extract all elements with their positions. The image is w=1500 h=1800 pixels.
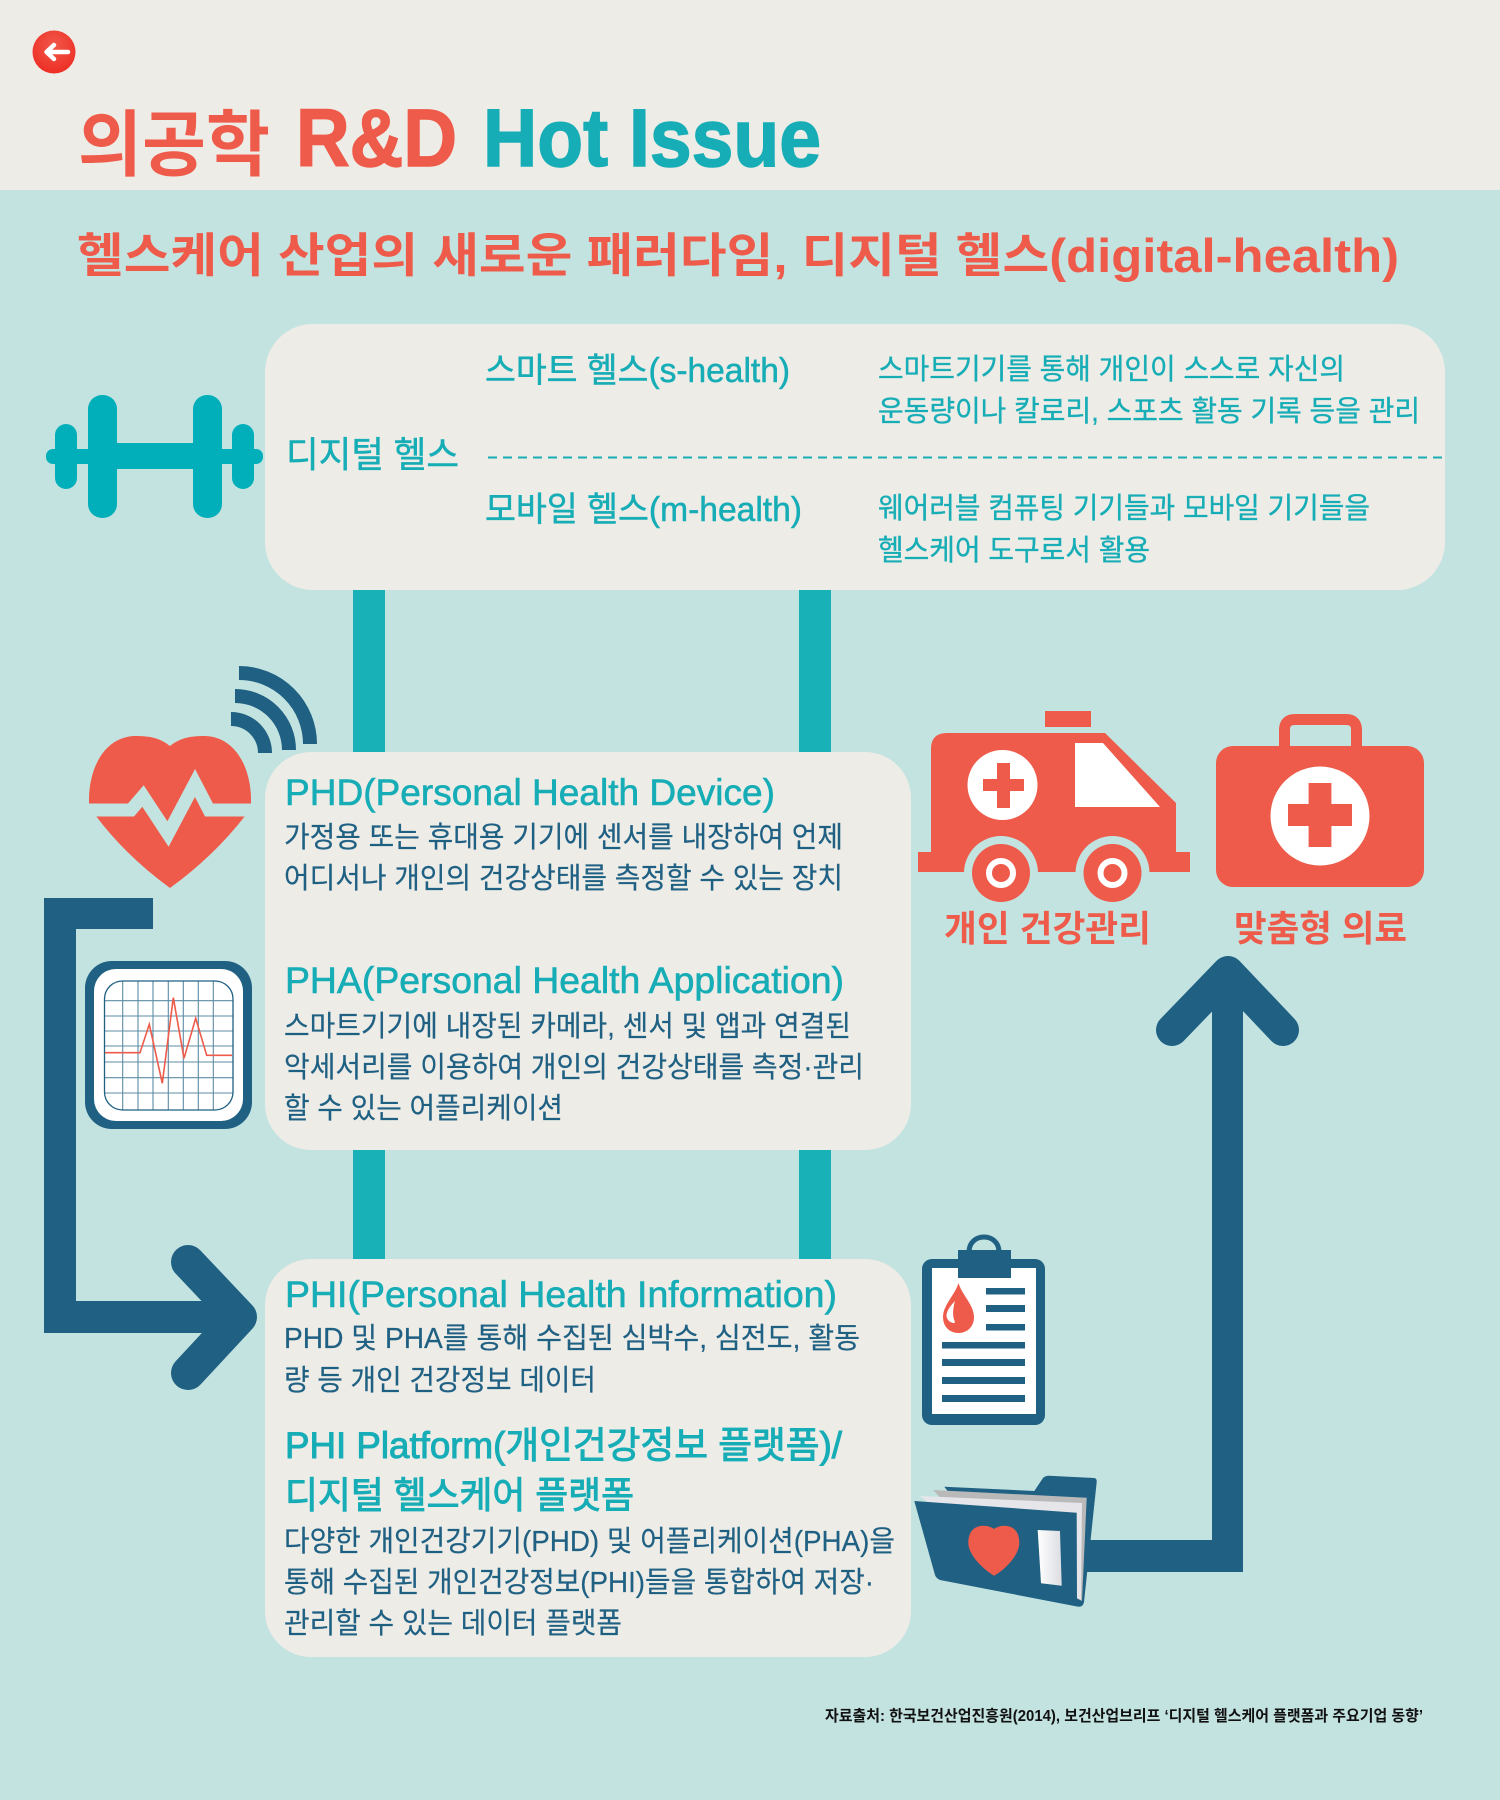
text block: PHA: 악세서리를 이용하여 개인의 건강상태를 측정·관리 xyxy=(284,1051,864,1084)
title: R&D xyxy=(296,93,457,184)
text block: PHI platform: 관리할 수 있는 데이터 플랫폼 xyxy=(284,1607,622,1640)
icon: back button xyxy=(32,30,76,74)
title: Hot Issue xyxy=(483,93,821,184)
row: m-health: 웨어러블 컴퓨팅 기기들과 모바일 기기들을 xyxy=(878,493,1370,525)
source note: 자료출처: 한국보건산업진흥원(2014), 보건산업브리프 ‘디지털 헬스케어 플랫폼과 주요기업 동향’ xyxy=(825,1707,1423,1725)
arrow: right connector to outcomes xyxy=(1080,972,1283,1572)
row: s-health: 스마트 헬스(s-health) xyxy=(485,352,790,390)
text block: PHI platform: 통해 수집된 개인건강정보(PHI)들을 통합하여 저장· xyxy=(284,1566,874,1599)
text block: PHI xyxy=(284,1274,860,1397)
panel: PHI and PHI platform xyxy=(265,1259,911,1657)
text block: PHA xyxy=(284,960,864,1125)
icon: first aid kit xyxy=(1216,720,1424,887)
subtitle: 헬스케어 산업의 새로운 패러다임, 디지털 헬스(digital-health) xyxy=(77,229,1399,282)
text block: PHI platform xyxy=(284,1425,895,1640)
header band xyxy=(0,0,1500,190)
text block: PHD: 어디서나 개인의 건강상태를 측정할 수 있는 장치 xyxy=(284,862,843,895)
icon: wifi signal xyxy=(231,673,310,753)
text block: PHI platform: 다양한 개인건강기기(PHD) 및 어플리케이션(PHA)을 xyxy=(284,1526,895,1558)
icon: ambulance xyxy=(918,711,1190,910)
icon: health record folder xyxy=(914,1476,1097,1607)
icon: medical clipboard xyxy=(922,1237,1045,1425)
icon: ECG monitor xyxy=(85,961,252,1129)
arrow: left connector to PHI xyxy=(44,898,240,1373)
text block: PHI: 량 등 개인 건강정보 데이터 xyxy=(284,1364,596,1397)
text block: PHI platform: PHI Platform(개인건강정보 플랫폼)/ xyxy=(285,1425,843,1466)
icon: dumbbell xyxy=(46,395,263,518)
label: personalized medicine: 맞춤형 의료 xyxy=(1234,908,1407,949)
heading: digital health: 디지털 헬스 xyxy=(286,434,459,475)
icon: heart with pulse xyxy=(80,736,260,888)
label: personal health management: 개인 건강관리 xyxy=(944,908,1151,949)
text block: PHD: PHD(Personal Health Device) xyxy=(285,772,775,813)
text block: PHD: 가정용 또는 휴대용 기기에 센서를 내장하여 언제 xyxy=(284,821,843,854)
row: m-health: 헬스케어 도구로서 활용 xyxy=(878,534,1150,567)
text block: PHD xyxy=(284,772,843,895)
text block: PHI: PHI(Personal Health Information) xyxy=(285,1274,837,1315)
row: s-health: 스마트기기를 통해 개인이 스스로 자신의 xyxy=(878,354,1345,386)
row: s-health: 운동량이나 칼로리, 스포츠 활동 기록 등을 관리 xyxy=(878,395,1420,428)
text block: PHI: PHD 및 PHA를 통해 수집된 심박수, 심전도, 활동 xyxy=(284,1322,860,1355)
title: 의공학 xyxy=(78,106,270,186)
connector pillars xyxy=(353,585,831,1265)
row: m-health xyxy=(485,491,1370,567)
text block: PHA: PHA(Personal Health Application) xyxy=(285,960,844,1001)
row: s-health xyxy=(485,352,1420,428)
title xyxy=(78,93,821,186)
row: m-health: 모바일 헬스(m-health) xyxy=(485,491,802,529)
text block: PHI platform: 디지털 헬스케어 플랫폼 xyxy=(285,1475,634,1516)
panel: digital health xyxy=(265,324,1447,590)
panel: PHD and PHA xyxy=(265,752,911,1150)
text block: PHA: 스마트기기에 내장된 카메라, 센서 및 앱과 연결된 xyxy=(284,1011,851,1043)
text block: PHA: 할 수 있는 어플리케이션 xyxy=(284,1092,563,1125)
